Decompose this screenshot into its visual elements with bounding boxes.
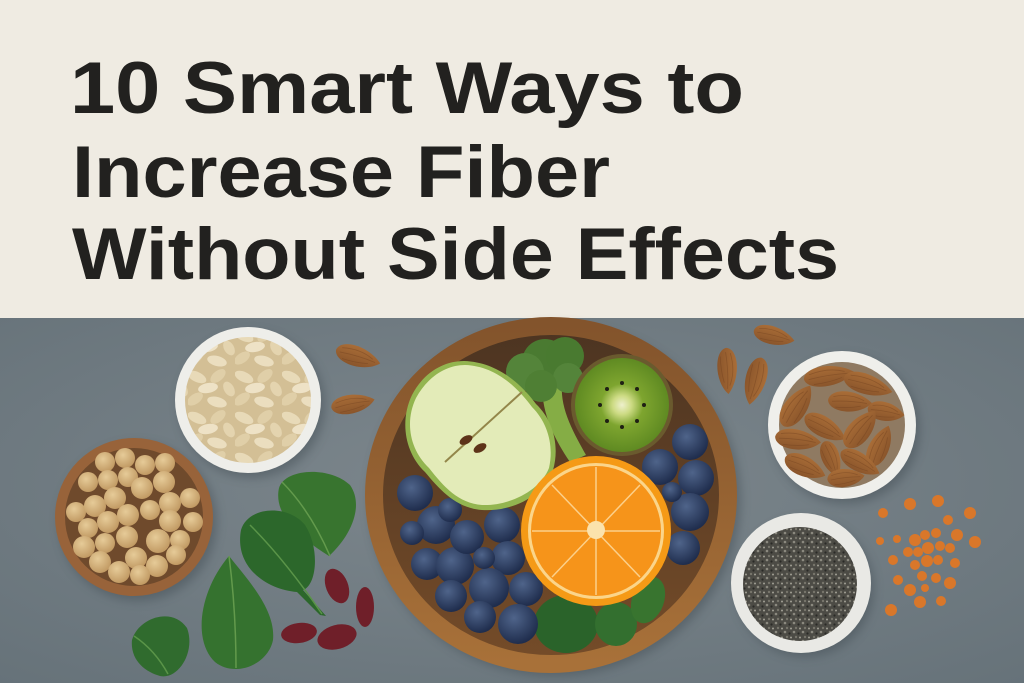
title: Without Side Effects (72, 214, 839, 295)
title panel (0, 0, 1024, 318)
orange slice (521, 456, 671, 606)
bowl of almonds (768, 351, 916, 499)
kiwi slice (571, 354, 673, 456)
blueberries (397, 424, 714, 644)
title: Increase Fiber (72, 132, 610, 213)
loose almonds left (330, 340, 383, 417)
soft shadows (59, 324, 920, 676)
bowl of chickpeas (55, 438, 213, 596)
bowl of chia seeds (731, 513, 871, 653)
loose almonds right (717, 322, 797, 407)
title: 10 Smart Ways to (70, 48, 744, 129)
title (70, 48, 839, 295)
bowl of oats (175, 327, 321, 473)
apple half (405, 361, 556, 510)
large wooden bowl (374, 326, 728, 664)
broccoli (506, 337, 586, 462)
food photo panel (0, 318, 1024, 683)
red lentils (876, 495, 981, 616)
spinach in bowl (534, 572, 671, 653)
spinach leaves (132, 472, 356, 676)
kidney beans (280, 565, 374, 654)
